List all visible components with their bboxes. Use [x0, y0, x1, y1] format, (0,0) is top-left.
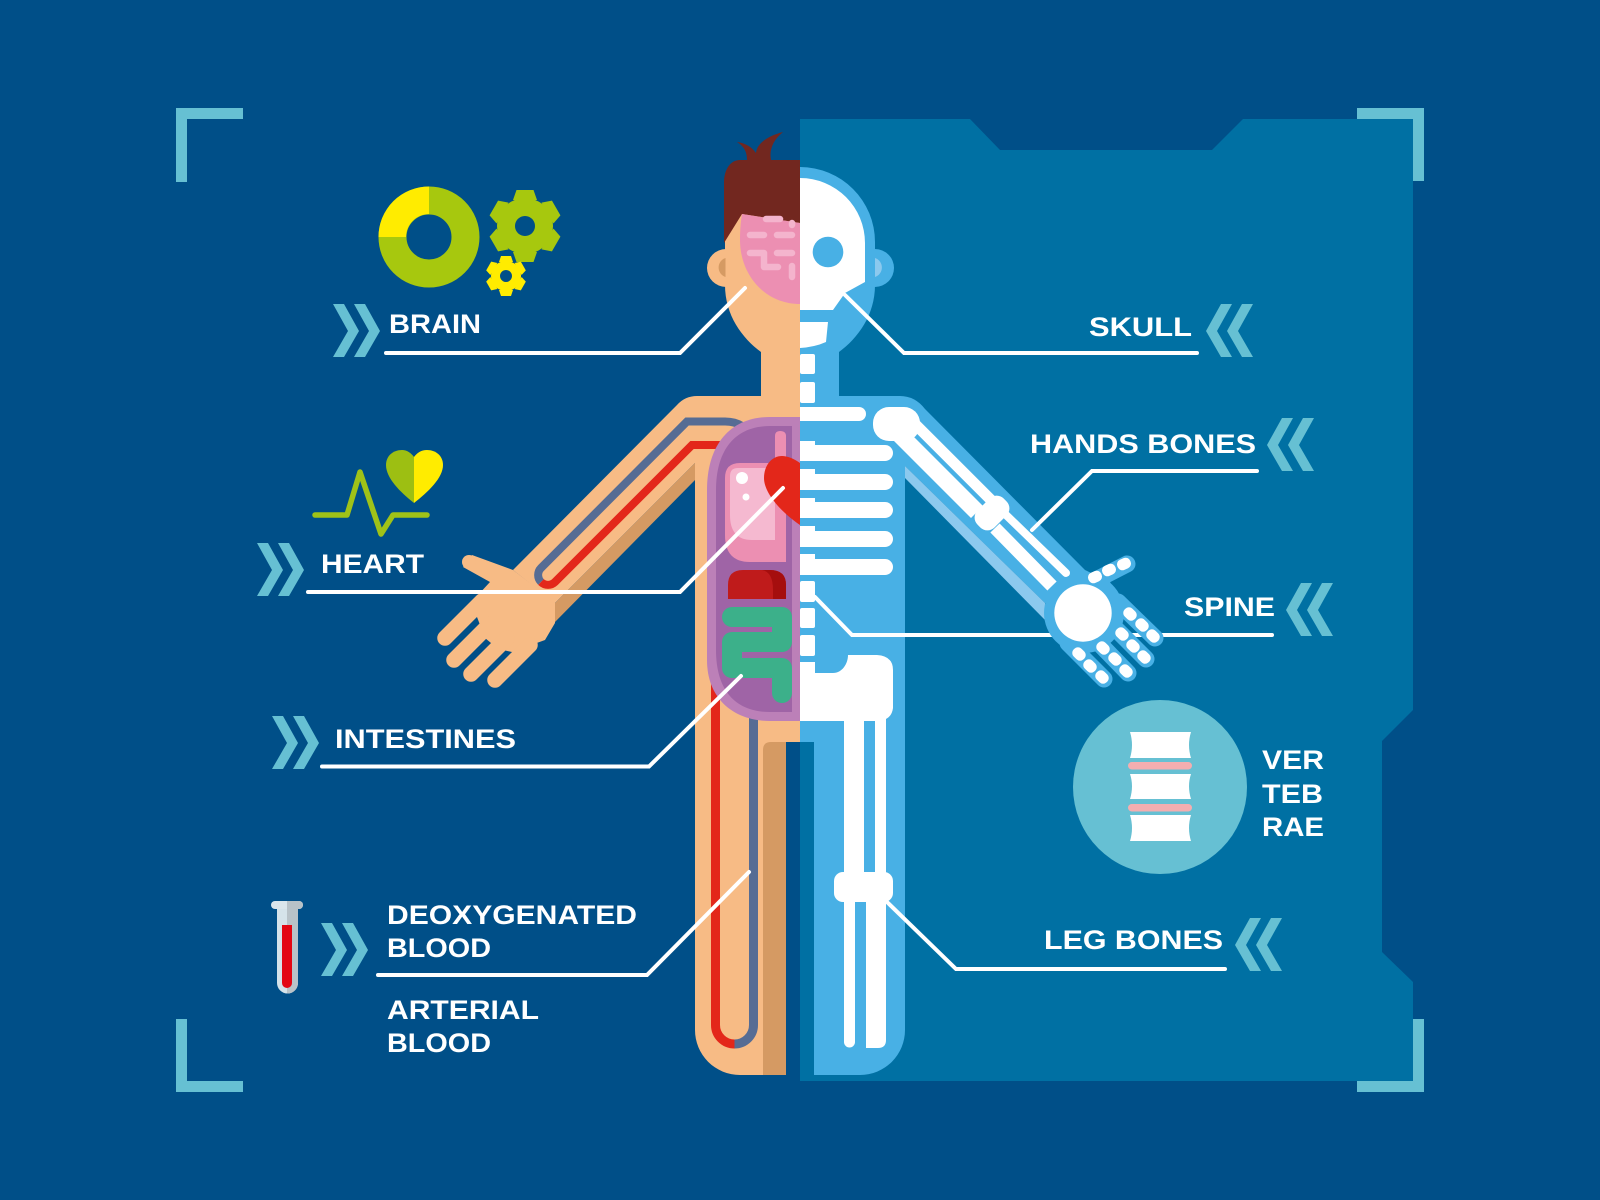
- torso cavity: [707, 417, 800, 721]
- icon: pulse line: [315, 472, 427, 534]
- label: vertebrae: VER: [1262, 745, 1324, 775]
- leader lines: [308, 288, 1257, 975]
- panel: right x-ray screen: [800, 119, 1413, 1081]
- chevrons: spine: [1286, 583, 1333, 636]
- label: deoxygenated blood: BLOOD: [387, 933, 491, 963]
- liver: [728, 570, 786, 599]
- intestines: [732, 617, 782, 693]
- label: intestines: INTESTINES: [335, 724, 516, 754]
- eye socket: [813, 237, 843, 267]
- label: leg bones: LEG BONES: [1044, 925, 1223, 955]
- arm vein deoxygenated: [538, 422, 742, 582]
- chevrons: hands bones: [1267, 418, 1314, 471]
- leader line: spine: [815, 597, 1272, 635]
- spine and ribs: [800, 354, 893, 656]
- leg vein and artery: [716, 680, 754, 1044]
- blue body half: [800, 167, 1126, 1075]
- label: arterial blood: [387, 995, 539, 1058]
- label: arterial blood: ARTERIAL: [387, 995, 539, 1025]
- skull: [800, 178, 865, 348]
- label: heart: HEART: [321, 549, 425, 579]
- arm bones: [873, 407, 1066, 586]
- heart organ: [764, 456, 800, 525]
- icon: small gear: [485, 256, 527, 296]
- label: vertebrae: [1262, 745, 1324, 842]
- arm artery: [541, 445, 722, 585]
- corner brackets: [176, 108, 1424, 1092]
- peach body half: [445, 160, 800, 1075]
- label: deoxygenated blood: [387, 900, 637, 963]
- chevrons: leg bones: [1235, 918, 1282, 971]
- label: arterial blood: BLOOD: [387, 1028, 491, 1058]
- chevrons: heart: [257, 543, 304, 596]
- leg shadow: [763, 742, 786, 1075]
- hand: [445, 555, 555, 680]
- label: deoxygenated blood: DEOXYGENATED: [387, 900, 637, 930]
- label: brain: BRAIN: [389, 309, 481, 339]
- chevrons: intestines: [272, 716, 319, 769]
- icon: heart: [386, 450, 443, 503]
- jaw: [800, 322, 828, 348]
- label: spine: SPINE: [1184, 592, 1275, 622]
- icon: big gear: [488, 190, 562, 262]
- label: vertebrae: TEB: [1262, 779, 1323, 809]
- arm highlight: [905, 466, 1045, 620]
- chevrons: blood: [321, 923, 368, 976]
- label: vertebrae: RAE: [1262, 812, 1324, 842]
- skeleton hand: [1044, 556, 1162, 686]
- icon: test tube: [271, 901, 303, 994]
- chevrons: skull: [1206, 304, 1253, 357]
- arm shadow: [555, 463, 695, 622]
- label: hands bones: HANDS BONES: [1030, 429, 1256, 459]
- brain: [740, 214, 800, 304]
- vertebrae circle: [1073, 700, 1247, 874]
- icon: brain donut: [378, 186, 466, 274]
- organs: [707, 417, 800, 721]
- pelvis and leg bones: [800, 655, 893, 1048]
- left ear: [707, 249, 745, 287]
- label: skull: SKULL: [1089, 312, 1192, 342]
- chevrons: brain: [333, 304, 380, 357]
- lung: [725, 431, 786, 562]
- hair: [724, 132, 800, 243]
- right ear: [856, 249, 894, 287]
